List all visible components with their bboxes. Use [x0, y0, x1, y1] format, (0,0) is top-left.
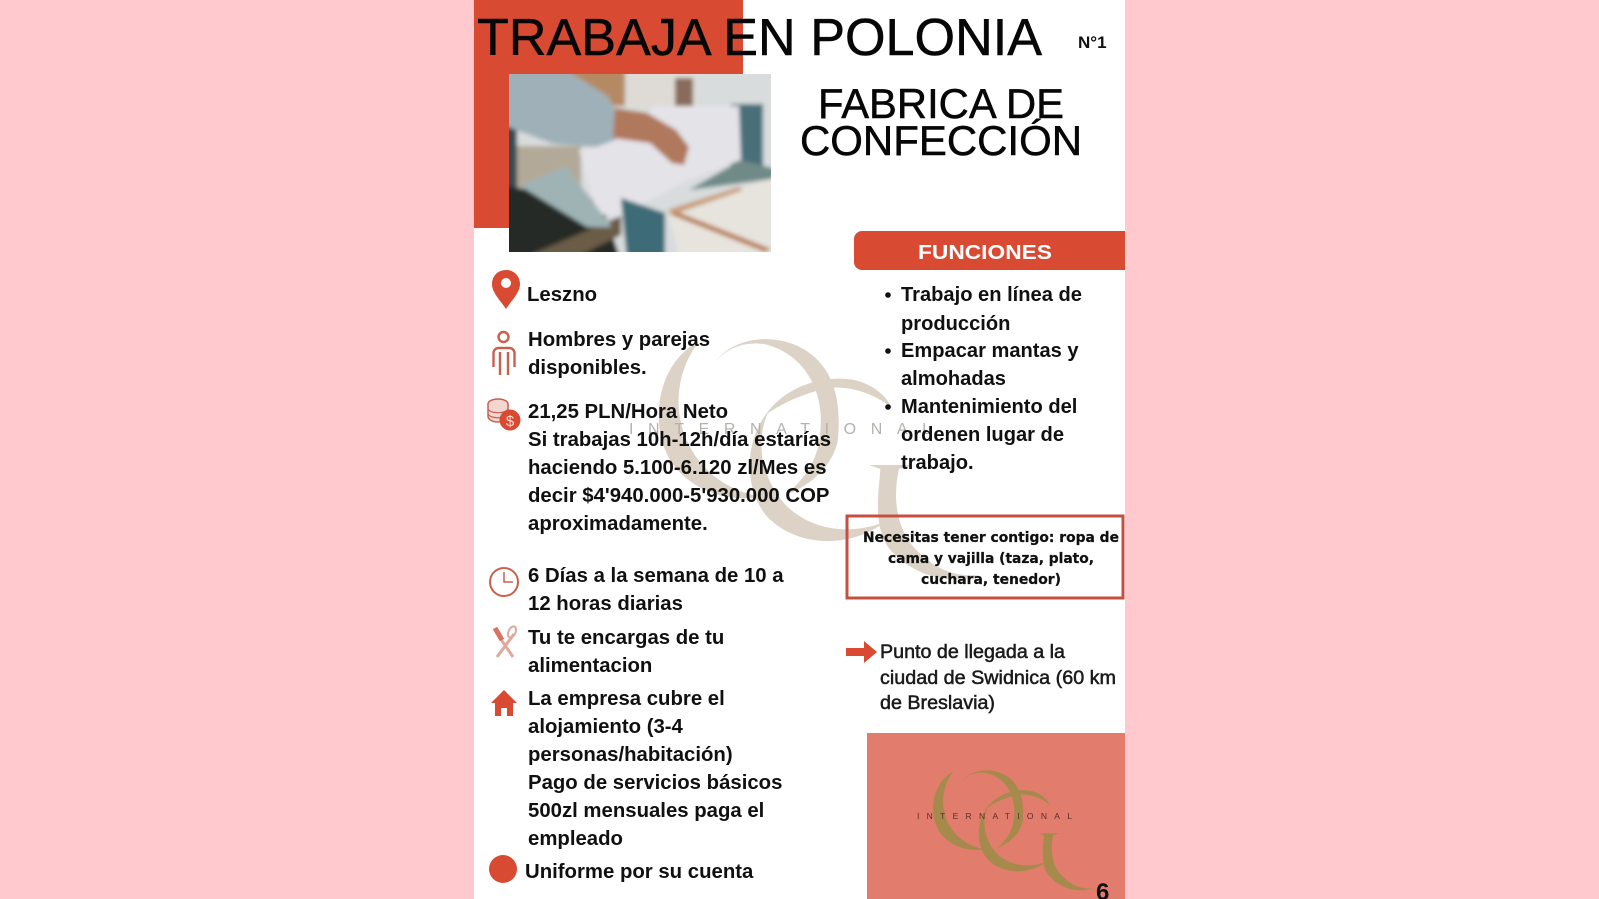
- housing text: La empresa cubre el: [528, 688, 725, 710]
- issue number: N°1: [1078, 33, 1107, 52]
- housing text: alojamiento (3-4: [528, 716, 684, 738]
- housing text: Pago de servicios básicos: [528, 772, 782, 794]
- salary text: haciendo 5.100-6.120 zl/Mes es: [528, 457, 827, 479]
- icon: person: [494, 332, 514, 375]
- schedule text: 12 horas diarias: [528, 593, 683, 615]
- logo wordmark: INTERNATIONAL: [917, 811, 1079, 821]
- subtitle: CONFECCIÓN: [800, 117, 1082, 164]
- icon: clock: [490, 568, 518, 596]
- workers text: Hombres y parejas: [528, 329, 710, 351]
- uniform text: Uniforme por su cuenta: [525, 861, 754, 883]
- icon: house: [491, 690, 517, 716]
- subtitle: [800, 80, 1082, 164]
- watermark logo: [659, 339, 979, 579]
- housing text: 500zl mensuales paga el: [528, 800, 764, 822]
- food text: Tu te encargas de tu: [528, 627, 724, 649]
- salary text: decir $4'940.000-5'930.000 COP: [528, 485, 829, 507]
- functions list: Empacar mantas y: [901, 340, 1079, 362]
- functions list: [885, 284, 1082, 474]
- functions list: Mantenimiento del: [901, 396, 1077, 418]
- watermark wordmark: INTERNATIONAL: [629, 421, 946, 438]
- food text: alimentacion: [528, 655, 652, 677]
- arrival text: ciudad de Swidnica (60 km: [880, 668, 1116, 689]
- callout: what to bring: cuchara, tenedor): [921, 571, 1061, 588]
- workers text: [528, 329, 710, 379]
- salary text: 21,25 PLN/Hora Neto: [528, 401, 728, 423]
- title: TRABAJA EN POLONIA: [477, 9, 1042, 67]
- photo: worker packing a blanket: [509, 74, 771, 252]
- salary text: Si trabajas 10h-12h/día estarías: [528, 429, 831, 451]
- callout: what to bring: cama y vajilla (taza, plato,: [888, 550, 1094, 567]
- functions list: almohadas: [901, 368, 1006, 390]
- panel: funciones header: [854, 231, 1125, 270]
- panel: logo box: [867, 733, 1125, 899]
- logo: [933, 770, 1093, 890]
- arrival text: [880, 642, 1116, 714]
- arrival text: Punto de llegada a la: [880, 642, 1065, 663]
- functions list: trabajo.: [901, 452, 974, 474]
- functions list: ordenen lugar de: [901, 424, 1064, 446]
- subtitle: FABRICA DE: [818, 80, 1064, 127]
- callout: what to bring: [847, 516, 1123, 598]
- housing text: [528, 688, 782, 850]
- icon: location pin: [492, 270, 520, 309]
- schedule text: 6 Días a la semana de 10 a: [528, 565, 784, 587]
- schedule text: [528, 565, 784, 615]
- location text: Leszno: [527, 284, 597, 306]
- salary text: aproximadamente.: [528, 513, 708, 535]
- functions list: Trabajo en línea de: [901, 284, 1082, 306]
- arrow: [846, 641, 877, 663]
- white poster panel: [474, 0, 1125, 899]
- arrival text: de Breslavia): [880, 693, 995, 714]
- housing text: personas/habitación): [528, 744, 733, 766]
- salary text: [528, 401, 831, 535]
- red header block: [474, 0, 743, 228]
- functions list: producción: [901, 313, 1010, 335]
- icon: coins: [488, 399, 520, 430]
- callout: what to bring: Necesitas tener contigo: ropa de: [863, 529, 1119, 546]
- icon: cutlery: [495, 625, 518, 657]
- workers text: disponibles.: [528, 357, 647, 379]
- icon: coins: $: [506, 413, 515, 430]
- food text: [528, 627, 724, 677]
- housing text: empleado: [528, 828, 623, 850]
- icon: red dot: [489, 855, 517, 883]
- panel: funciones header: FUNCIONES: [918, 242, 1052, 264]
